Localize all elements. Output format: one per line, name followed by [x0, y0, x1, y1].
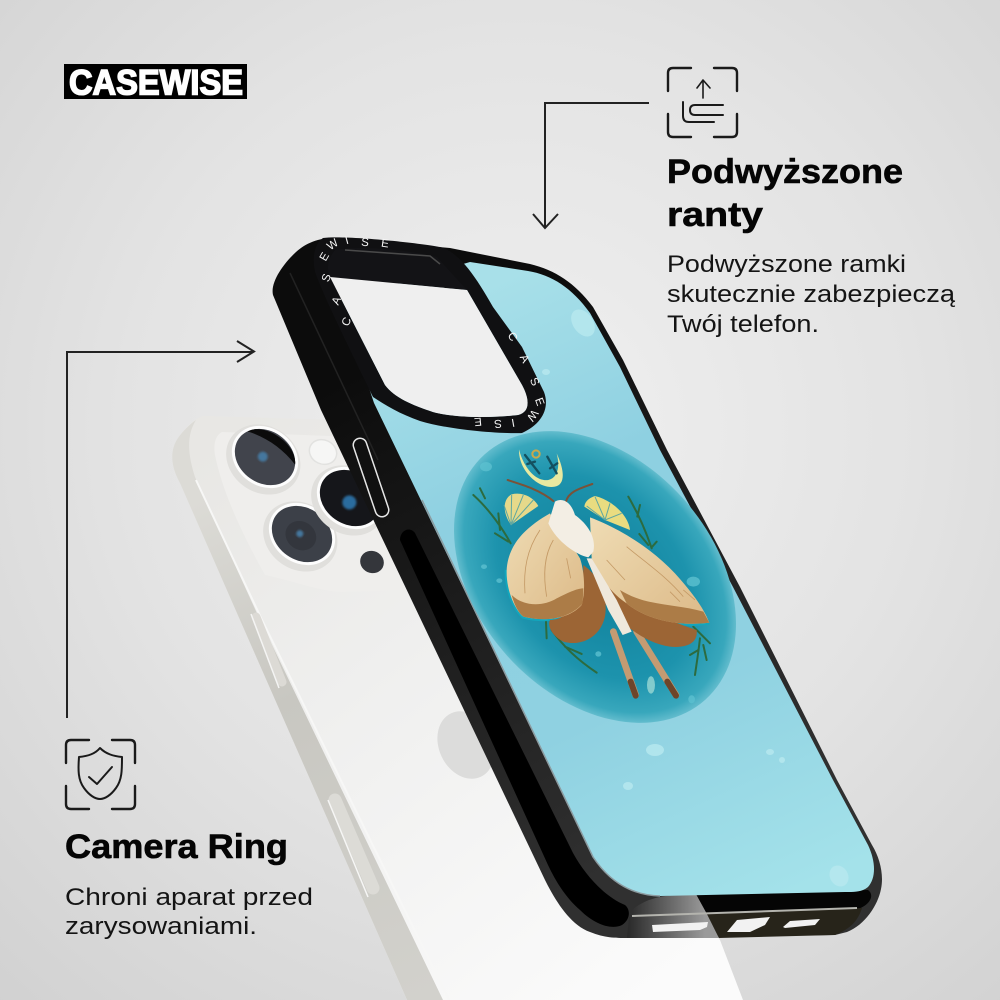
leaves — [473, 488, 710, 675]
white phone — [172, 410, 743, 1000]
antennae — [508, 480, 592, 502]
side slot — [400, 529, 629, 927]
fore wing left veins — [525, 530, 571, 597]
lens: right — [297, 451, 399, 550]
apple logo — [427, 702, 505, 788]
ring inner top wall — [328, 248, 467, 290]
leg tips — [631, 682, 676, 696]
bottom base: transparent — [627, 914, 719, 938]
flash — [305, 435, 341, 469]
ring text: W — [524, 407, 540, 423]
bottom band: black — [696, 890, 871, 914]
ring text: A — [517, 353, 531, 365]
phone body — [172, 416, 743, 1000]
bottom highlight — [632, 908, 857, 916]
logo: CASEWISE: CASEWISE — [69, 64, 243, 102]
inner edge highlight — [196, 480, 449, 1000]
moon sprigs — [525, 455, 557, 473]
heading: raised edges: Podwyższone — [667, 153, 903, 191]
arrow: raised edges — [533, 103, 649, 228]
camera bump — [214, 432, 410, 592]
ring text — [318, 235, 546, 429]
port: charging — [727, 917, 770, 932]
lemon right — [584, 496, 630, 530]
port: speaker right — [783, 919, 820, 928]
hind wing right — [595, 565, 697, 647]
port: speaker left — [652, 922, 708, 932]
sensor — [356, 547, 388, 577]
heading: raised edges — [667, 153, 903, 234]
phone side edge — [172, 420, 443, 1000]
ring text: C — [505, 331, 519, 343]
fore wing right band — [620, 590, 709, 624]
ring text: S — [361, 237, 370, 249]
body fluff — [548, 500, 594, 557]
text: camera ring description: Chroni aparat przed — [65, 884, 313, 911]
black case — [273, 235, 882, 938]
lemon left — [504, 494, 538, 525]
hind wing left — [549, 565, 606, 643]
bottom band: transparent — [630, 894, 707, 916]
legs — [613, 632, 676, 695]
heading: raised edges: ranty — [667, 196, 763, 234]
crescent moon — [519, 449, 563, 487]
illustration: moth — [473, 449, 710, 703]
lens: bottom — [249, 487, 351, 586]
camera ring — [314, 237, 546, 433]
ring text: E — [532, 396, 546, 408]
ring text: S — [493, 417, 502, 429]
button: side upper — [251, 614, 282, 688]
ring text: C — [340, 316, 354, 328]
case body — [273, 238, 882, 938]
ring wall highlight — [345, 250, 440, 264]
icon: shield — [66, 740, 135, 809]
wing halo — [507, 570, 709, 624]
case crease — [290, 273, 378, 460]
button with white outline — [360, 445, 382, 510]
text: raised edges description — [667, 251, 956, 338]
fore wing right veins — [607, 547, 695, 602]
camera window — [330, 277, 528, 417]
button centre — [360, 445, 382, 510]
heading: camera ring: Camera Ring — [65, 828, 288, 866]
icon: raised edges — [668, 68, 737, 137]
fore wing left band — [512, 588, 583, 619]
ring text: S — [320, 272, 334, 284]
ring text: I — [510, 416, 516, 428]
ring text: I — [344, 235, 350, 247]
text: raised edges description: Twój telefon. — [667, 311, 819, 338]
art panel — [340, 262, 874, 896]
fore wing right — [590, 517, 709, 624]
ring text: E — [318, 250, 332, 263]
ring text: A — [330, 295, 344, 307]
panel spots — [542, 305, 852, 890]
lens: top — [212, 410, 314, 509]
illustration: oval — [397, 375, 793, 779]
fore wing left — [507, 513, 584, 619]
ring text: E — [380, 238, 390, 251]
abdomen — [587, 558, 632, 635]
ring text: E — [473, 415, 482, 427]
text: camera ring description — [65, 884, 313, 940]
text: raised edges description: Podwyższone ramki — [667, 251, 906, 278]
arrow: camera ring — [67, 341, 254, 718]
ring text: W — [325, 237, 341, 253]
moon ring — [532, 450, 540, 458]
bottom base: olive — [707, 908, 862, 938]
oval spots — [480, 462, 700, 703]
text: camera ring description: zarysowaniami. — [65, 913, 257, 940]
ring text: S — [527, 376, 541, 388]
text: raised edges description: skutecznie zabezpieczą — [667, 281, 956, 308]
panel edge — [422, 500, 660, 896]
button: side lower — [328, 800, 373, 897]
